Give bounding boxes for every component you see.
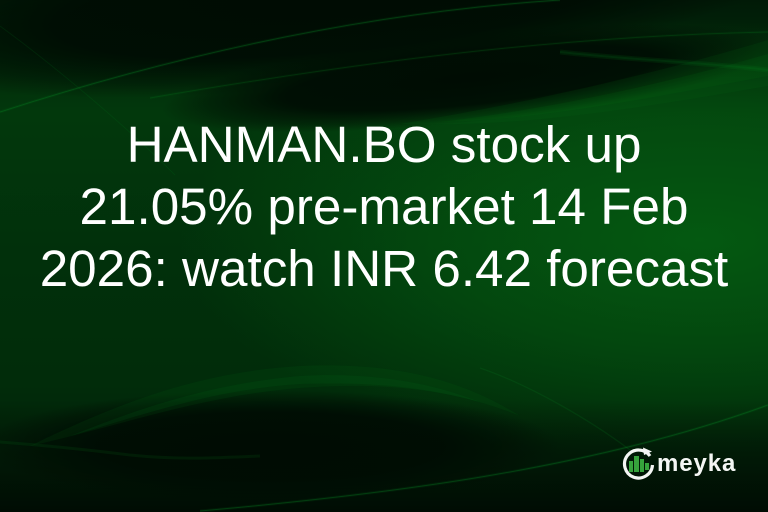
bottom dark band xyxy=(0,400,768,512)
title: 21.05% pre-market 14 Feb xyxy=(80,178,688,235)
title: 2026: watch INR 6.42 forecast xyxy=(40,240,728,297)
top dark sweep xyxy=(0,0,768,134)
top bright band xyxy=(400,40,768,125)
title: HANMAN.BO stock up xyxy=(127,116,641,173)
wordmark: meyka xyxy=(657,450,736,477)
logo: meyka xyxy=(622,448,736,480)
soft band above bottom body xyxy=(30,365,520,446)
top dark lens xyxy=(157,2,768,154)
title xyxy=(40,116,728,297)
icon: chart in ring xyxy=(625,448,652,478)
bottom dark body xyxy=(0,390,560,502)
